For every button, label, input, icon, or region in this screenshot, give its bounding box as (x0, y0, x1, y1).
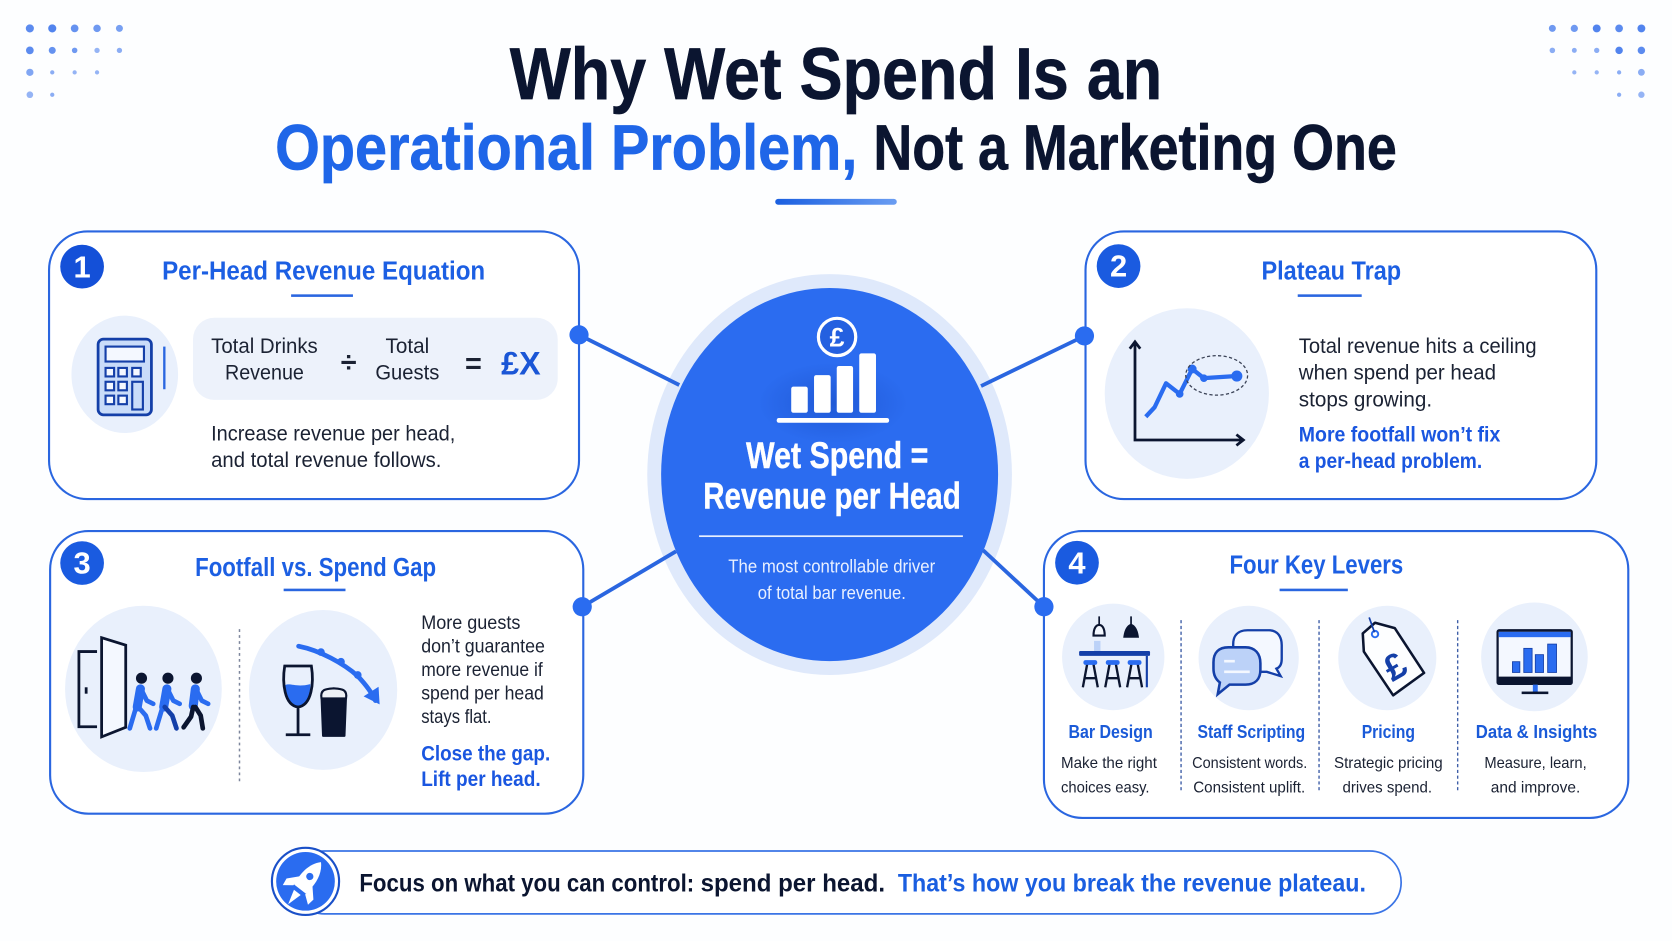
equation box: Total (385, 334, 429, 358)
bottom callout (272, 848, 1401, 915)
title (275, 32, 1397, 205)
equation box (193, 318, 558, 400)
callout text: Focus on what you can control: (359, 870, 694, 897)
text: bar design (1061, 722, 1157, 796)
hub subtext (728, 555, 935, 603)
heading: plateau trap: Plateau Trap (1261, 257, 1401, 285)
equation box: £X (501, 345, 541, 381)
equation box: Guests (375, 361, 439, 385)
icon: calculator (71, 316, 178, 433)
text: footfall explanation: don’t guarantee (421, 637, 545, 658)
text: bar design: Bar Design (1068, 722, 1153, 742)
icon: guests entering door (65, 606, 222, 772)
equation box: ÷ (341, 347, 357, 379)
badge 3: 3 (74, 546, 91, 581)
text: staff scripting (1192, 722, 1307, 796)
text: plateau explanation: Total revenue hits a ceiling (1299, 334, 1537, 358)
icon: monitor with bar chart (1481, 603, 1588, 711)
text: plateau explanation: stops growing. (1299, 387, 1432, 411)
icon: bar counter and stools (1062, 604, 1164, 710)
text: data and insights: and improve. (1491, 779, 1580, 796)
connector dots (569, 325, 1094, 616)
text: bar design: choices easy. (1061, 779, 1150, 796)
callout text: spend per head. (701, 870, 885, 897)
lever: data and insights (1476, 603, 1597, 796)
heading: footfall vs spend gap: Footfall vs. Spend Gap (195, 554, 436, 582)
text: equation takeaway (211, 421, 455, 472)
icon: pound coin and rising bars: £ (830, 323, 845, 353)
text: footfall explanation (421, 613, 550, 791)
title: Why Wet Spend Is an (510, 32, 1162, 115)
lever: pricing (1334, 606, 1443, 796)
callout text (359, 870, 1366, 897)
hub heading: Wet Spend = (746, 434, 928, 476)
badge 1 (60, 245, 104, 288)
text: footfall explanation: spend per head (421, 684, 544, 705)
heading: per-head revenue equation: Per-Head Revenue Equation (162, 257, 485, 285)
text: footfall explanation: stays flat. (421, 707, 492, 728)
title: Operational Problem, (275, 112, 857, 184)
badge 4 (1055, 541, 1099, 585)
text: data and insights (1476, 722, 1597, 796)
text: data and insights: Data & Insights (1476, 722, 1597, 742)
equation box: Revenue (225, 361, 304, 385)
heading: four key levers: Four Key Levers (1229, 552, 1403, 580)
icon: drinks with falling spend arrow (249, 610, 397, 770)
text: equation takeaway: and total revenue follows. (211, 448, 441, 472)
panel: four key levers (1044, 531, 1628, 818)
text: pricing: Strategic pricing (1334, 755, 1443, 772)
text: pricing: Pricing (1362, 722, 1415, 742)
icon: speech bubbles (1199, 606, 1299, 710)
icon: price tag: £ (1376, 644, 1414, 689)
lever: staff scripting (1192, 606, 1307, 796)
text: footfall explanation: More guests (421, 613, 520, 634)
panel: plateau trap (1086, 231, 1596, 499)
panel: footfall vs spend gap (50, 531, 583, 814)
text: pricing (1334, 722, 1443, 796)
title: Not a Marketing One (873, 112, 1397, 184)
hub heading (703, 434, 961, 517)
text: plateau explanation: when spend per head (1298, 361, 1496, 385)
icon: price tag (1338, 606, 1436, 710)
badge 1: 1 (74, 249, 91, 284)
text: equation takeaway: Increase revenue per head, (211, 421, 455, 445)
equation box: Total Drinks (211, 334, 318, 358)
text: footfall explanation: more revenue if (421, 660, 543, 681)
lever: bar design (1061, 604, 1164, 796)
hub heading: Revenue per Head (703, 475, 961, 517)
icon: rocket (272, 848, 339, 915)
icon: pound coin and rising bars (758, 318, 907, 444)
decorative dots: top right (1549, 24, 1645, 98)
callout text: That’s how you break the revenue plateau. (898, 870, 1366, 897)
badge 2 (1097, 244, 1140, 288)
text: data and insights: Measure, learn, (1484, 755, 1587, 772)
text: staff scripting: Consistent uplift. (1193, 779, 1305, 796)
badge 3 (60, 541, 104, 585)
text: plateau explanation (1298, 334, 1537, 473)
text: staff scripting: Staff Scripting (1197, 722, 1305, 742)
decorative dots: top left (26, 24, 123, 98)
text: footfall explanation: Close the gap. (421, 742, 550, 765)
panel: per-head revenue equation (49, 231, 579, 499)
connector lines from hub to cards (579, 335, 1084, 607)
text: staff scripting: Consistent words. (1192, 755, 1307, 772)
hub subtext: The most controllable driver (728, 555, 935, 576)
equation box: = (465, 348, 482, 380)
text: bar design: Make the right (1061, 755, 1157, 772)
text: plateau explanation: More footfall won’t fix (1299, 422, 1500, 446)
text: plateau explanation: a per-head problem. (1299, 449, 1482, 473)
central hub: wet spend equals revenue per head (647, 274, 1012, 675)
text: footfall explanation: Lift per head. (421, 768, 541, 791)
badge 2: 2 (1110, 249, 1127, 284)
chart: revenue plateau (1105, 308, 1269, 479)
hub subtext: of total bar revenue. (758, 582, 906, 603)
badge 4: 4 (1068, 545, 1086, 580)
text: pricing: drives spend. (1343, 779, 1432, 796)
